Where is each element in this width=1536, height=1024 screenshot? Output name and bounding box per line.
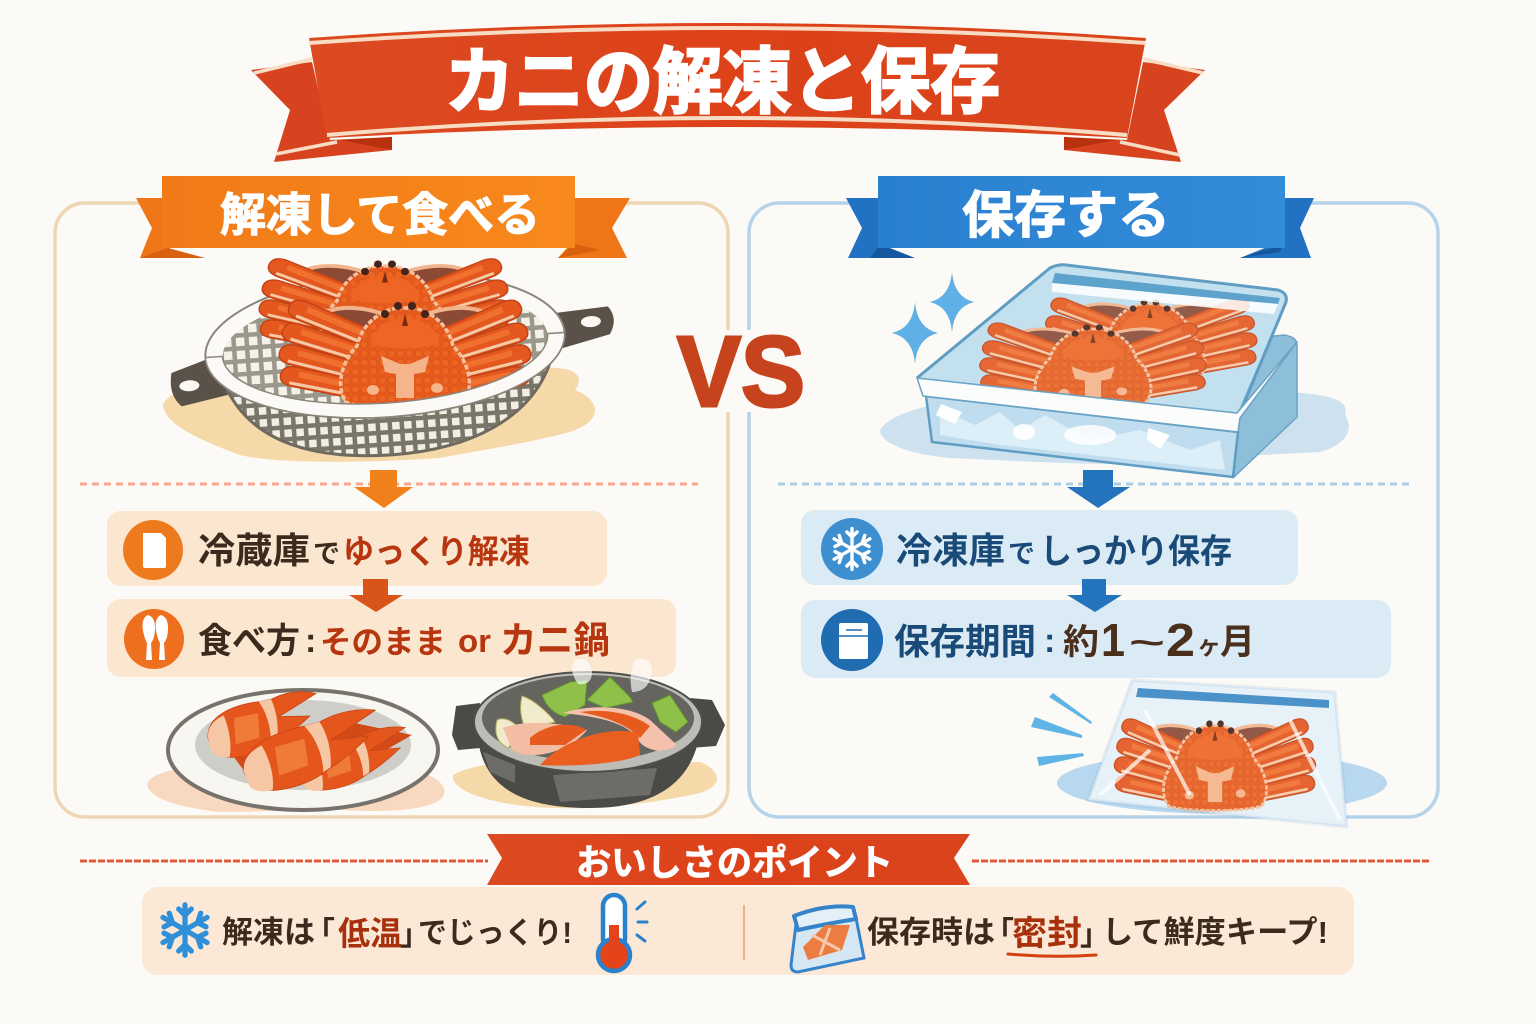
tip: sealed storage: 」 [1080,919,1110,952]
tip: sealed storage: して鮮度キープ! [1102,915,1328,950]
thaw ribbon heading [136,176,630,258]
illustration: crab hot pot [452,659,725,808]
row text: ヶ [1197,633,1221,660]
tips panel [142,887,1354,975]
row text: しっかり保存 [1040,533,1232,571]
icon: thermometer [598,895,647,971]
row: how to eat [107,599,676,677]
tip: low temperature: 低温 [338,915,402,952]
row text: : [305,622,316,660]
illustration: crab in freezer bag [1057,680,1387,827]
arrow 1 left [354,470,413,508]
row text: 冷凍庫 [896,530,1005,571]
title text: カニの解凍と保存 [445,43,1000,123]
tips divider lines [80,860,1430,862]
row text: ゆっくり解凍 [343,533,530,570]
tip: low temperature: 解凍は [222,915,315,950]
tip: sealed storage: 密封 [1012,915,1082,953]
icon: cutlery [124,609,184,669]
tip: low temperature: 」 [400,919,430,952]
tip: low temperature [222,915,572,952]
panel: store [749,176,1438,827]
tip: low temperature: 「 [305,917,335,950]
icon: snowflake circle [821,518,883,580]
divider [743,905,745,960]
row text: or [458,623,491,659]
row text [198,530,530,571]
row text: 冷蔵庫 [198,530,310,571]
row text: で [1008,539,1035,569]
tip: low temperature: でじっくり! [418,917,572,950]
icon: sealed bag [791,906,864,972]
tip: sealed storage: 保存時は [867,915,995,950]
row: freezer [801,510,1298,585]
tips ribbon heading: おいしさのポイント [576,842,893,883]
vs label: VS [677,316,805,428]
row text: 月 [1220,623,1255,662]
row: refrigerator thaw [107,511,607,586]
row text: カニ鍋 [500,620,610,661]
row text: 保存期間 [894,621,1036,662]
row text [894,614,1255,666]
arrow 2 right [1067,579,1122,612]
row text [896,530,1232,571]
illustration: crabs in ice container [880,265,1349,477]
row text: 食べ方 [198,622,300,661]
dashed divider right [778,482,1410,486]
title ribbon [251,23,1205,162]
store ribbon heading [846,176,1314,258]
icon: refrigerator [821,609,883,671]
arrow 1 right [1067,470,1130,508]
store ribbon heading: 保存する [962,187,1170,244]
tip: sealed storage [867,915,1328,956]
row text: : [1044,622,1055,660]
arrow 2 left [349,579,403,612]
row text: 1 [1101,614,1125,666]
dashed divider left [80,482,698,486]
thaw ribbon heading: 解凍して食べる [220,189,540,241]
icon: snowflake [163,905,207,955]
icon: sparkles [892,272,974,364]
row text: 2 [1166,614,1195,666]
row text: そのまま [320,624,446,660]
tips ribbon heading [487,834,970,885]
illustration: crab claws on plate [147,690,445,812]
illustration: crabs in colander [163,255,622,470]
row text: 約 [1063,623,1099,662]
row text: で [313,539,340,569]
steam [572,659,652,692]
row text [198,620,610,661]
icon: fridge page [123,520,183,580]
row text: ~ [1129,624,1165,662]
icon: freshness rays [1031,693,1092,766]
panel: thaw and eat [55,176,728,817]
row: storage period [801,600,1391,678]
tip: sealed storage: 「 [984,917,1014,950]
